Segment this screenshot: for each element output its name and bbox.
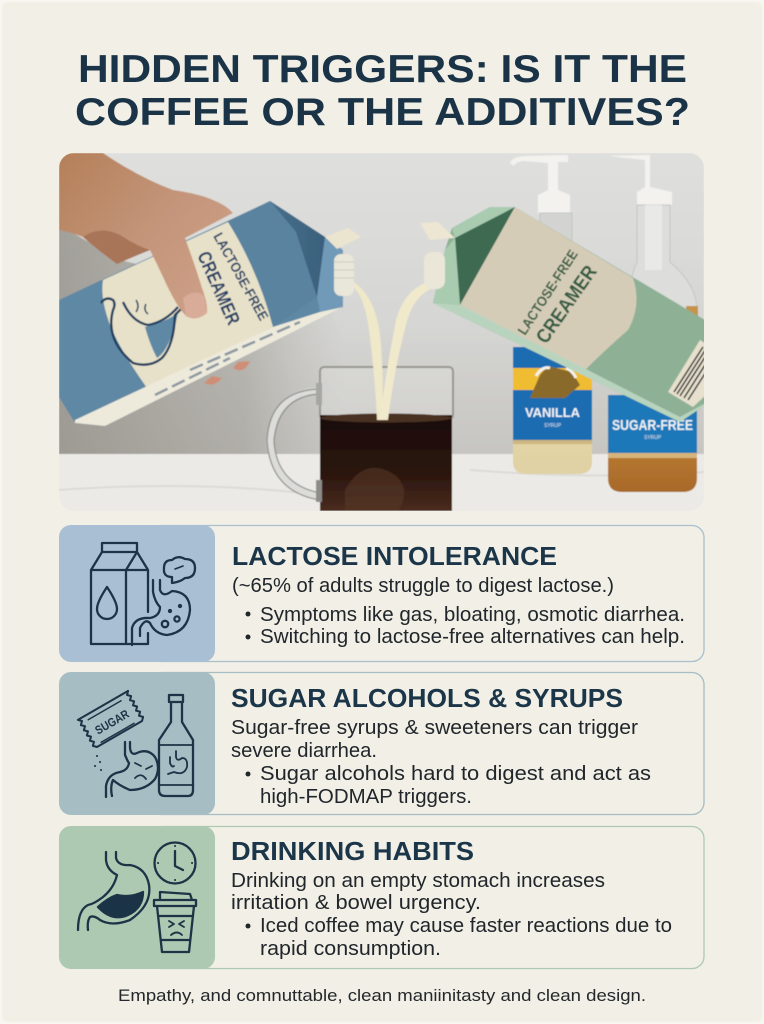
blue carton	[59, 201, 361, 426]
body text: Symptoms like gas, bloating, osmotic diarrhea.	[260, 604, 685, 626]
heading: SUGAR ALCOHOLS & SYRUPS	[231, 685, 623, 713]
body text	[231, 870, 672, 960]
barcode	[668, 340, 704, 408]
cream band	[102, 222, 273, 388]
bottom strip	[433, 303, 720, 422]
milk stream from green carton	[380, 281, 432, 420]
bottom strip	[75, 307, 343, 426]
body text: rapid consumption.	[260, 938, 441, 960]
green carton	[420, 207, 720, 422]
body text: Iced coffee may cause faster reactions due to	[260, 915, 672, 937]
wall background	[59, 153, 704, 455]
heading: DRINKING HABITS	[231, 838, 474, 866]
icon tile: teal	[59, 672, 215, 815]
body text: (~65% of adults struggle to digest lactose.)	[232, 575, 614, 597]
stomach graphic on carton	[145, 313, 178, 358]
vanilla syrup bottle: VANILLA	[525, 405, 581, 420]
heading: LACTOSE INTOLERANCE	[232, 543, 557, 571]
title	[75, 48, 690, 134]
hand holding carton	[59, 153, 233, 318]
carton label: CREAMER	[192, 248, 243, 328]
body text: Drinking on an empty stomach increases	[231, 870, 605, 892]
panel: sugar alcohols and syrups	[59, 672, 704, 815]
vanilla syrup bottle	[510, 155, 592, 474]
icon: sugar packet, stomach and bottle	[78, 691, 193, 797]
icon tile: green	[59, 826, 215, 969]
text box outline	[150, 526, 704, 662]
icon tile: blue	[59, 525, 215, 662]
glass mug of coffee	[267, 367, 453, 511]
icon: sugar packet, stomach and bottle: SUGAR	[93, 707, 132, 737]
body text: Switching to lactose-free alternatives can help.	[260, 626, 685, 648]
body text: Sugar-free syrups & sweeteners can trigger	[231, 717, 638, 739]
photo: creamer cartons pouring into coffee	[59, 153, 720, 512]
text box outline	[150, 826, 704, 968]
body text: high-FODMAP triggers.	[260, 786, 472, 808]
carton label: LACTOSE-FREE	[514, 247, 581, 338]
text box outline	[150, 672, 704, 814]
vanilla syrup bottle: SYRUP	[544, 423, 562, 429]
body text	[231, 717, 651, 808]
icon: milk carton and upset stomach	[91, 543, 195, 645]
title: HIDDEN TRIGGERS: IS IT THE	[78, 48, 687, 91]
carton label	[198, 232, 269, 326]
footer caption: Empathy, and comnuttable, clean maniinitasty and clean design.	[118, 986, 646, 1005]
icon: stomach, clock and coffee cup	[78, 842, 196, 952]
body text: Sugar alcohols hard to digest and act as	[260, 763, 651, 785]
panel: lactose intolerance	[59, 525, 704, 662]
fingertips under carton	[204, 361, 250, 385]
milk stream from blue carton	[354, 282, 383, 421]
marble table	[59, 454, 704, 512]
title: COFFEE OR THE ADDITIVES?	[75, 91, 690, 134]
body text: severe diarrhea.	[231, 740, 377, 762]
cream label area	[460, 207, 637, 372]
panel: drinking habits	[59, 826, 704, 969]
carton label: LACTOSE-FREE	[210, 230, 272, 323]
carton label: CREAMER	[532, 261, 602, 348]
sugar-free syrup bottle	[608, 155, 698, 492]
sugar-free syrup bottle: SYRUP	[644, 435, 662, 441]
body text: irritation & bowel urgency.	[231, 892, 481, 914]
sugar-free syrup bottle: SUGAR-FREE	[612, 417, 693, 434]
body text	[232, 575, 685, 648]
